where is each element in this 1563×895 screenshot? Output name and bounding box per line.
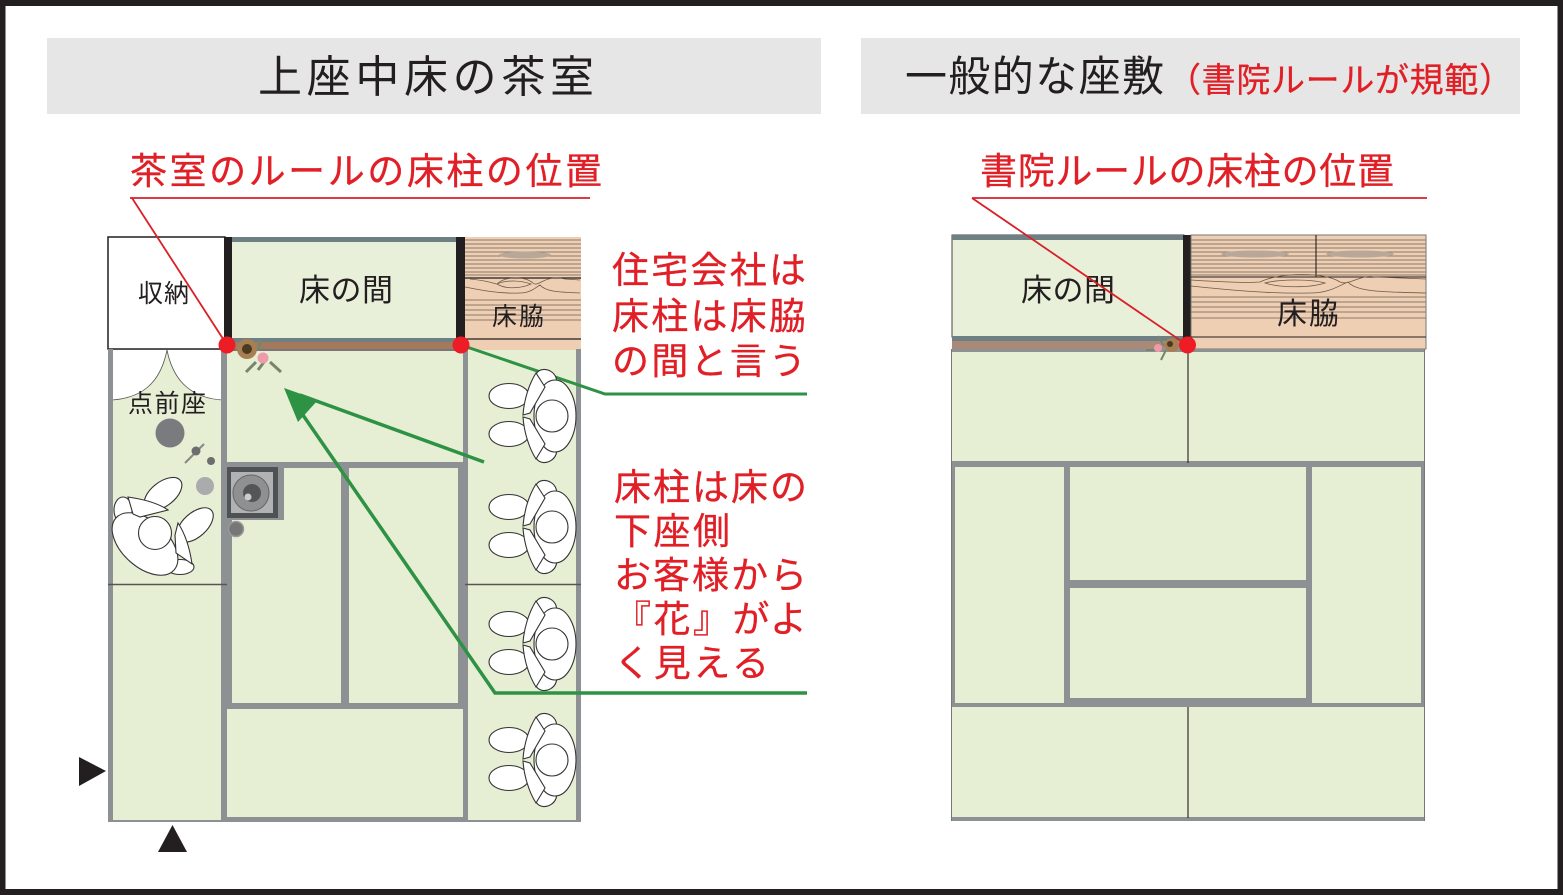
text: pillar explanation note: 『花』がよ [614,599,807,640]
text: pillar explanation note: 床柱は床の [614,467,807,508]
temae-za host mat: 点前座 [128,390,206,418]
callout: shoin rule pillar position [972,151,1427,354]
tatami borders [951,349,1425,821]
entrance arrow: bottom [158,825,187,852]
flower vase [1146,336,1179,360]
storage room: 収納 [138,280,189,308]
tokonoma alcove [952,235,1192,349]
text: pillar explanation note: 下座側 [614,511,730,552]
panel: tea room floor plan [79,237,581,852]
text: housing companies note: 床柱は床脇 [612,296,806,337]
flower vase [237,339,281,372]
panel: left heading [47,38,821,114]
subtitle: shoin rule: （書院ルールが規範） [1167,62,1513,100]
callout: shoin rule pillar position: 書院ルールの床柱の位置 [980,151,1394,192]
text: pillar explanation note: お客様から [614,555,807,596]
guest 1 [489,366,576,466]
sunken hearth [227,463,284,536]
green sight arrows [284,388,807,693]
tokonoma alcove: 床の間 [299,273,393,308]
text: housing companies note: の間と言う [612,341,806,382]
guest 2 [489,477,576,577]
tokonoma alcove: 床の間 [1021,273,1115,308]
panel: ordinary zashiki floor plan [951,235,1426,821]
title: ordinary zashiki: 一般的な座敷 [905,53,1164,100]
panel: right heading [861,38,1520,114]
host figure [101,471,219,587]
guest 3 [489,594,576,694]
tokowaki wood side alcove: 床脇 [492,303,544,331]
tatami borders [108,349,581,822]
tea utensils [156,418,215,495]
tokowaki wood side alcove: 床脇 [1277,298,1339,331]
tokowaki wood side alcove [465,237,581,350]
tokonoma alcove [224,237,465,351]
text: housing companies note: 住宅会社は [612,250,806,291]
guest 4 [489,710,576,810]
green leader line [452,336,807,394]
callout: tea room rule pillar position [130,151,602,354]
entrance arrow: side [79,757,106,786]
storage room [108,237,225,349]
tokowaki wood side alcove [1191,235,1426,349]
text: pillar explanation note: く見える [614,643,769,684]
callout: tea room rule pillar position: 茶室のルールの床柱の位置 [130,151,602,192]
title: tea room: 上座中床の茶室 [258,53,594,102]
temae-za host mat [112,350,222,418]
